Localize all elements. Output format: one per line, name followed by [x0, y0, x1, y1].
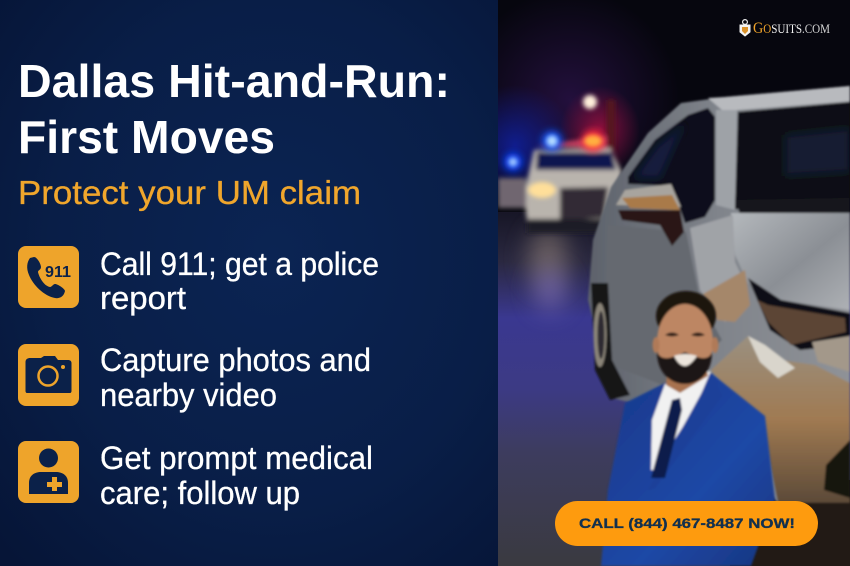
- windshield: [735, 102, 850, 212]
- step 2 text: Capture photos and: [100, 342, 371, 378]
- step 3 text: Get prompt medical: [100, 440, 373, 476]
- wheel well front: [824, 440, 850, 498]
- face: [657, 304, 713, 380]
- car: [588, 86, 850, 503]
- suit: [601, 373, 775, 566]
- road lower right: [730, 480, 850, 566]
- door: [605, 225, 722, 386]
- step 1 text: Call 911; get a police: [100, 246, 379, 282]
- call button: [555, 501, 818, 546]
- eyes: [665, 332, 705, 336]
- broken headlight: [748, 278, 850, 350]
- person: [601, 291, 775, 566]
- tie: [651, 398, 682, 478]
- icon: phone 911: 911: [45, 264, 71, 281]
- wipers: [735, 198, 850, 214]
- front grille: [812, 336, 850, 372]
- fender upper highlight: [690, 215, 748, 322]
- police lights: [504, 95, 604, 198]
- smile: [674, 354, 697, 366]
- title: Dallas Hit-and-Run:: [18, 55, 450, 107]
- neck: [666, 365, 708, 393]
- step 1: call 911: [18, 246, 379, 316]
- panel: left navy content: [0, 0, 498, 566]
- icon: phone 911: [18, 246, 79, 308]
- step 2 text: nearby video: [100, 377, 277, 413]
- bumper and tan front: [711, 336, 850, 503]
- lapel: [648, 374, 722, 490]
- hair: [656, 291, 716, 341]
- roof: [708, 86, 850, 110]
- icon: patient with cross: [18, 441, 79, 503]
- logo text: GOSUITS.COM: [753, 20, 830, 37]
- panel: night photo of damaged car: [455, 0, 850, 566]
- ears: [652, 337, 660, 353]
- side mirror: [616, 184, 684, 246]
- step 3 text: care; follow up: [100, 475, 300, 511]
- logo: GoSuits.com: [740, 20, 830, 37]
- road light reflection: [528, 228, 568, 288]
- purple reflection: [534, 268, 566, 312]
- logo icon: [740, 20, 750, 36]
- car body silhouette: [588, 86, 850, 503]
- ear right: [712, 337, 718, 353]
- step 3: medical care: [18, 440, 373, 511]
- A pillar: [716, 110, 737, 210]
- road: [498, 212, 850, 566]
- shirt: [651, 371, 711, 470]
- cracked paint: [748, 336, 795, 378]
- beard: [657, 352, 712, 384]
- step 2: capture photos: [18, 342, 371, 413]
- wheel: [591, 283, 630, 400]
- call button text: CALL (844) 467-8487 NOW!: [579, 515, 795, 531]
- subtitle: Protect your UM claim: [18, 174, 361, 211]
- police glow in the sky: [455, 0, 680, 210]
- fender tan panel: [703, 270, 750, 322]
- step 1 text: report: [100, 280, 186, 316]
- title: First Moves: [18, 111, 275, 163]
- side window: [628, 108, 715, 223]
- hood: [731, 213, 850, 310]
- icon: camera: [18, 344, 79, 406]
- police car: [498, 100, 622, 233]
